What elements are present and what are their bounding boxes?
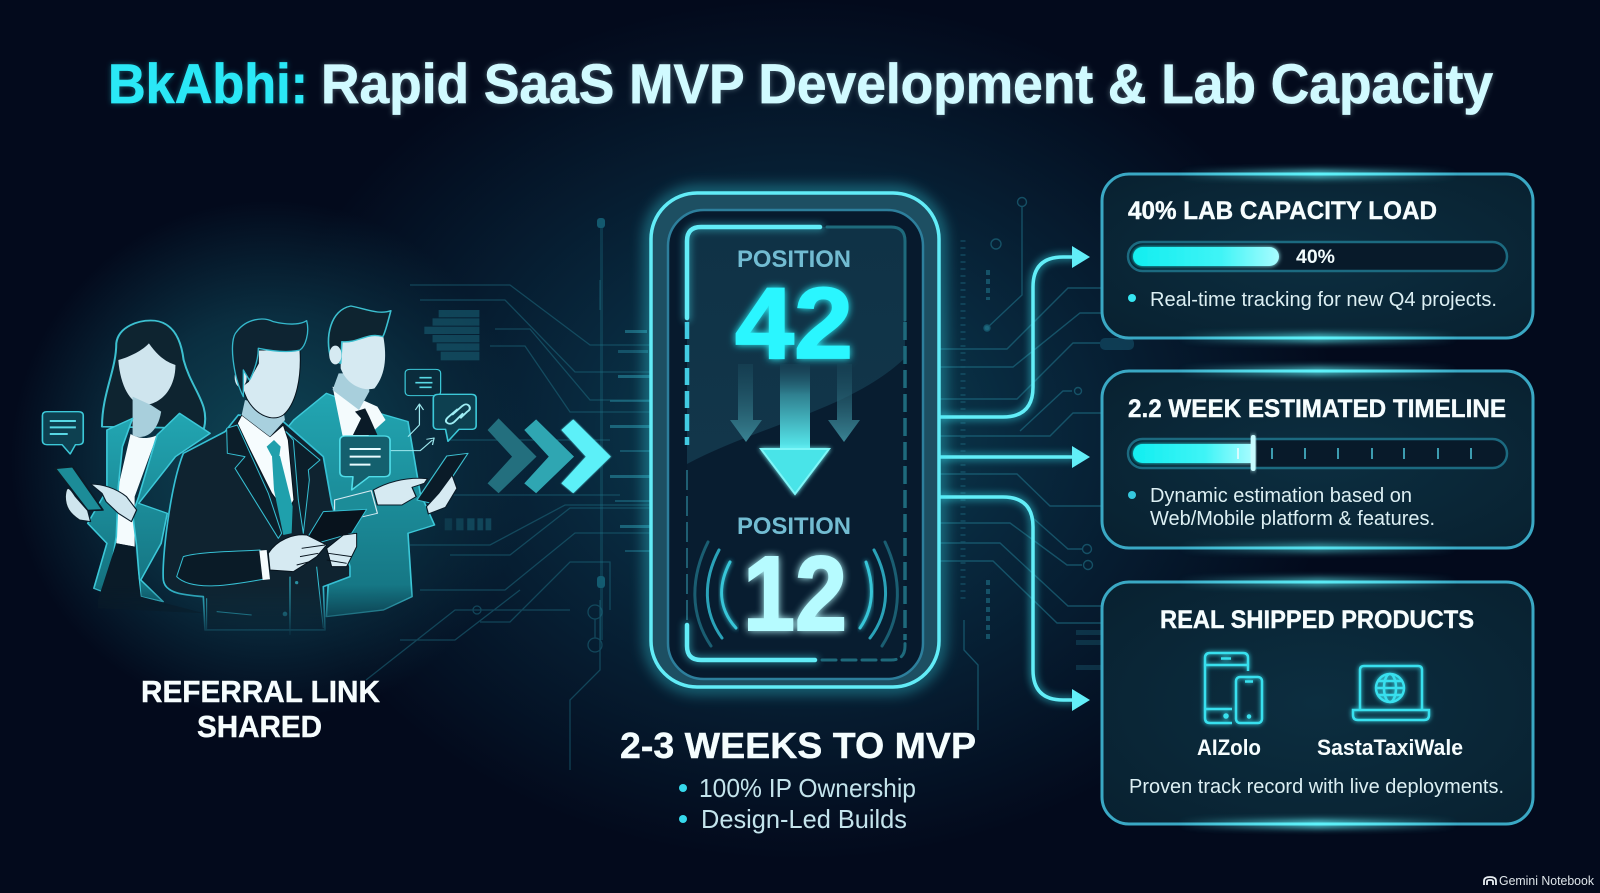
panel: lab capacity — [1102, 170, 1533, 342]
icon: share arrows — [390, 404, 434, 451]
panel: phone position tracker — [651, 193, 939, 687]
icon: upper chat bubble — [405, 369, 441, 396]
bullet text: Real-time tracking for new Q4 projects. — [1150, 289, 1497, 311]
label: position: POSITION — [737, 513, 851, 540]
watermark: Gemini Notebook: Gemini Notebook — [1499, 874, 1595, 888]
icon: link bubble — [433, 394, 476, 441]
text: 2-3 weeks to MVP: 2-3 WEEKS TO MVP — [620, 725, 976, 766]
progress bar 40 percent: 40% — [1296, 247, 1335, 268]
arrows: connectors from phone to cards — [939, 246, 1090, 711]
illustration: people sharing referral link — [42, 306, 491, 635]
number: 42: 42 — [735, 268, 853, 380]
label: position: POSITION — [737, 246, 851, 273]
text: 2-3 weeks to MVP: 100% IP Ownership — [699, 773, 916, 803]
title: BkAbhi: — [108, 52, 308, 115]
heading: 2.2 WEEK ESTIMATED TIMELINE — [1128, 395, 1506, 423]
data blocks — [424, 310, 491, 530]
circuit traces left — [366, 280, 650, 770]
title: Rapid SaaS MVP Development & Lab Capacity — [321, 52, 1493, 115]
arrow: triple chevrons — [488, 418, 611, 493]
bullet text — [1128, 485, 1435, 530]
bullet text: Dynamic estimation based on — [1150, 485, 1412, 507]
progress bar 40 percent — [1128, 242, 1507, 271]
number: 12: 12 — [743, 535, 847, 653]
bullet text: Web/Mobile platform & features. — [1150, 508, 1435, 530]
caption: referral link shared: SHARED — [197, 709, 322, 744]
product name: AIZolo: AIZolo — [1197, 735, 1261, 760]
data strips centre — [597, 218, 650, 640]
icon: mobile devices — [1205, 653, 1262, 723]
back row figures — [55, 306, 491, 617]
product name: SastaTaxiWale: SastaTaxiWale — [1317, 735, 1463, 760]
caption: referral link shared — [141, 674, 381, 744]
chat and link bubbles — [42, 369, 476, 490]
heading: 40% LAB CAPACITY LOAD — [1128, 197, 1437, 225]
right man — [286, 306, 435, 617]
circuit traces right — [940, 198, 1134, 730]
text: proven track record: Proven track record with live deployments. — [1129, 776, 1504, 798]
text: 2-3 weeks to MVP: Design-Led Builds — [701, 804, 907, 834]
pulse waves — [695, 542, 897, 646]
left phone and hands — [55, 467, 137, 522]
centre man — [163, 319, 367, 635]
heading: REAL SHIPPED PRODUCTS — [1160, 606, 1474, 634]
caption: referral link shared: REFERRAL LINK — [141, 674, 381, 709]
panel: estimated timeline — [1102, 367, 1533, 552]
right phone and hand — [335, 453, 468, 523]
icon: centre chat bubble — [340, 436, 390, 490]
panel: real shipped products — [1102, 578, 1533, 828]
screen bracket frame — [687, 227, 905, 660]
arrows: downward — [730, 364, 860, 494]
woman — [88, 321, 210, 613]
icon: left chat bubble — [42, 412, 83, 454]
icon: laptop with globe — [1353, 666, 1429, 720]
timeline bar — [1128, 435, 1507, 471]
text: 2-3 weeks to MVP — [620, 725, 976, 834]
